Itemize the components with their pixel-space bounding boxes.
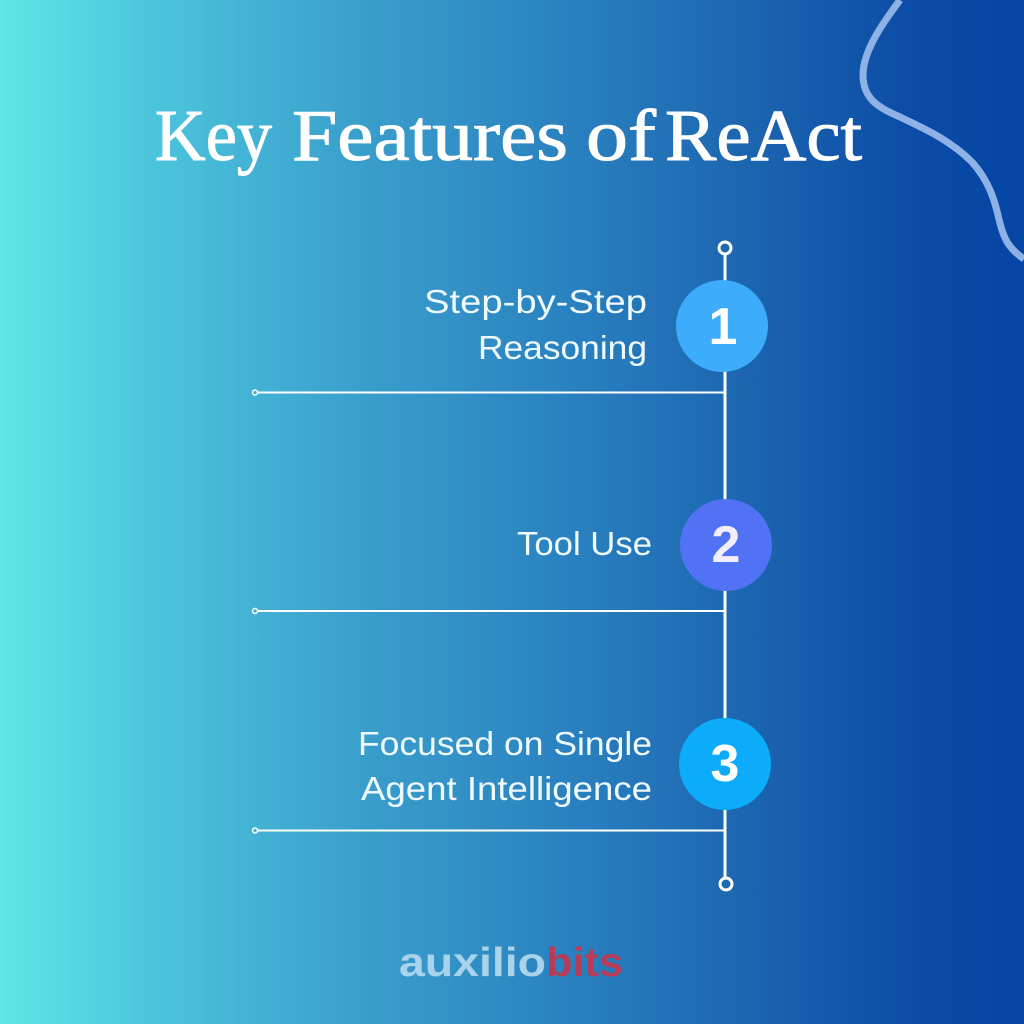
feature 1 number xyxy=(676,280,768,372)
feature 3 text: Agent Intelligence xyxy=(361,770,652,807)
title: Key xyxy=(155,95,272,176)
timeline xyxy=(252,242,732,890)
decorative curve xyxy=(863,0,1024,259)
feature 3 number: 3 xyxy=(711,735,739,793)
logo: auxilio xyxy=(399,939,546,985)
feature 3 number xyxy=(679,718,771,810)
feature 2 number xyxy=(680,499,772,591)
feature 2 text: Tool Use xyxy=(517,525,652,562)
feature 3 text: Focused on Single xyxy=(358,725,652,762)
feature 1 text: Reasoning xyxy=(478,329,647,366)
feature 1 text: Step-by-Step xyxy=(424,283,647,320)
title: Features xyxy=(292,95,568,176)
title: of xyxy=(586,95,657,176)
title: ReAct xyxy=(665,95,862,176)
logo: bits xyxy=(546,939,623,985)
logo xyxy=(399,939,623,985)
feature 1 text xyxy=(424,283,647,366)
feature 3 text xyxy=(358,725,652,807)
title xyxy=(155,95,862,176)
feature 1 number: 1 xyxy=(709,298,737,356)
feature 2 number: 2 xyxy=(712,516,740,574)
